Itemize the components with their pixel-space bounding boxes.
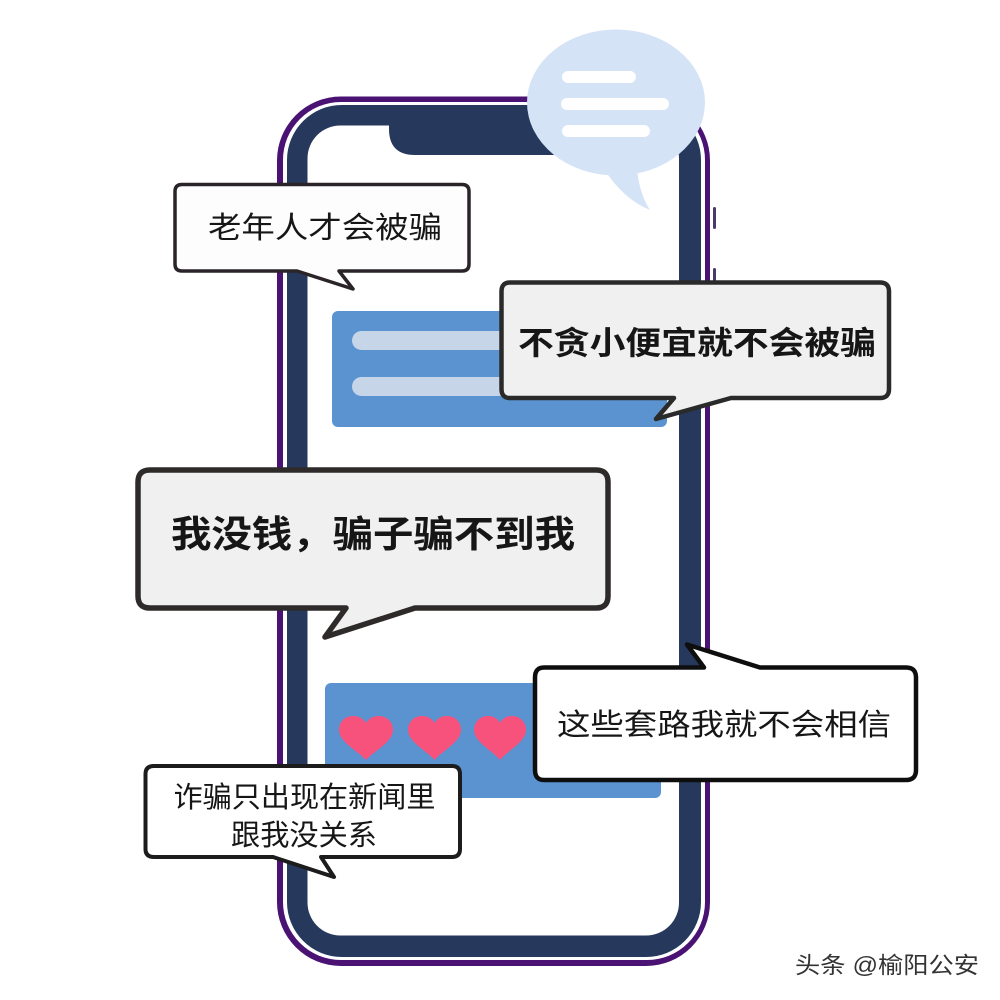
phone illustration	[277, 96, 716, 966]
callout: fraud only appears in the news	[146, 766, 460, 877]
speech bubble icon	[527, 30, 705, 210]
message card with text lines	[332, 311, 667, 427]
callout: not greedy means not scammed: 不贪小便宜就不会被骗	[518, 325, 876, 361]
message card with hearts	[325, 683, 661, 798]
callout: I won't believe these tricks	[535, 644, 916, 780]
callout: I won't believe these tricks: 这些套路我就不会相信	[557, 709, 891, 742]
callout: no money so scammers can't reach me: 我没钱，骗子骗不到我	[171, 514, 575, 555]
callout: no money so scammers can't reach me	[138, 470, 608, 637]
callout: fraud only appears in the news: 跟我没关系	[231, 819, 377, 852]
callout: fraud only appears in the news: 诈骗只出现在新闻里	[174, 781, 436, 814]
callout: not greedy means not scammed	[502, 282, 889, 419]
callout: only the elderly get scammed: 老年人才会被骗	[208, 212, 442, 245]
watermark: 头条 @榆阳公安	[795, 952, 979, 978]
callout: only the elderly get scammed	[175, 184, 469, 289]
